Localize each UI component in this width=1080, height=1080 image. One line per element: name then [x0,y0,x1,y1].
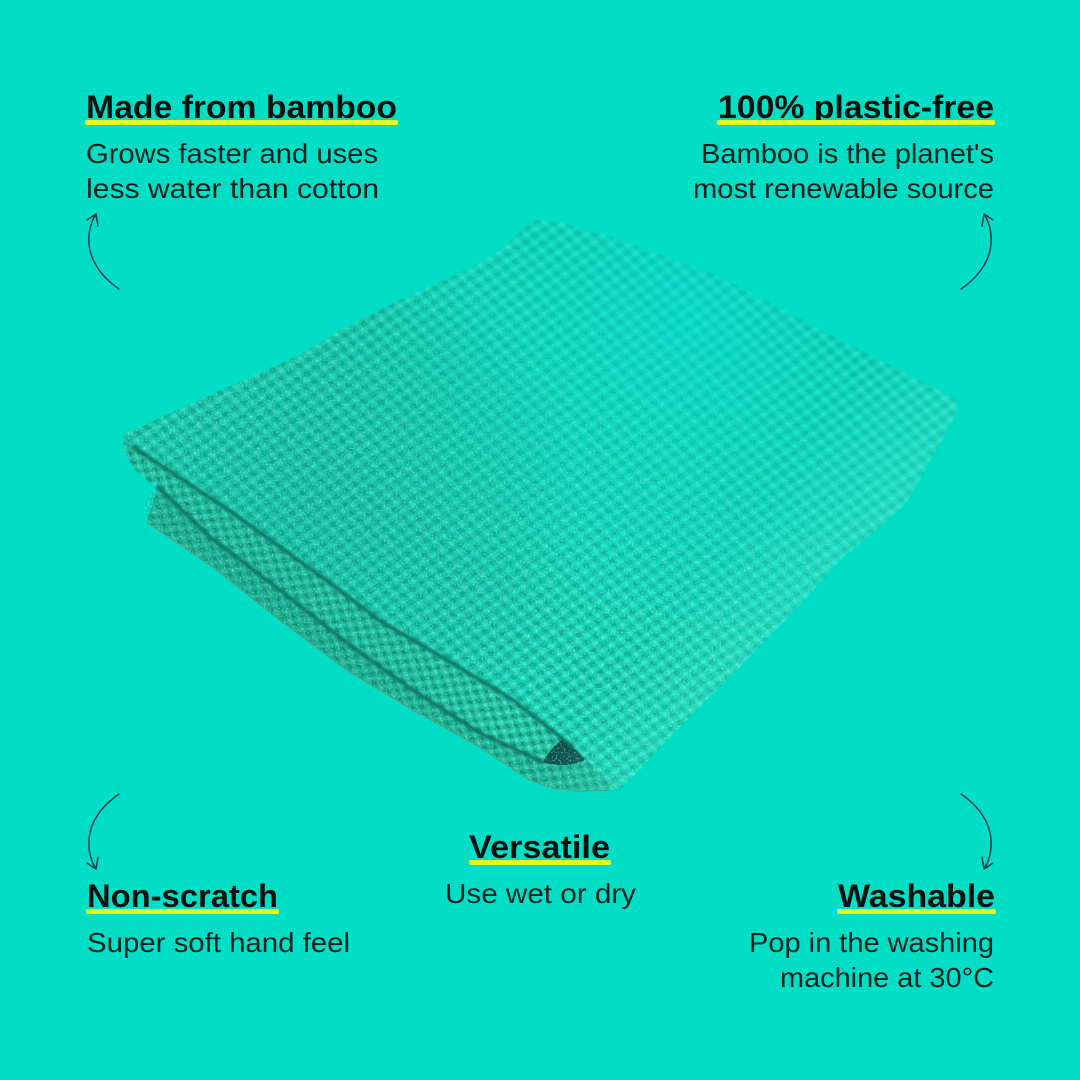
description: Bamboo is the planet's [701,138,994,169]
description [693,138,994,204]
cloth: bottom fold layer [147,487,627,791]
highlight underline [86,909,279,914]
description: Grows faster and uses [86,138,378,169]
cloth: fabric grain [115,215,965,795]
description: Pop in the washing [749,927,994,958]
cloth: middle fold layer [124,440,570,762]
arrow: bottom right [961,794,993,869]
heading: 100% plastic-free [718,89,994,125]
cloth: dark pocket between folds [543,738,590,765]
description: Use wet or dry [445,878,636,909]
highlight underline [85,120,398,125]
callout: plastic free [693,89,995,204]
description [86,138,379,204]
callout: made from bamboo [85,89,398,204]
arrow: top right [961,214,993,289]
description: less water than cotton [86,173,379,204]
description [749,927,994,993]
heading: Versatile [469,829,610,865]
cloth: fold creases [133,447,573,762]
heading: Non-scratch [87,878,278,914]
heading: Washable [838,878,995,914]
highlight underline [837,909,996,914]
photo: folded bamboo cloth [115,215,965,795]
cloth: top surface [122,220,958,788]
heading: Made from bamboo [86,89,397,125]
cloth: light and shadow [115,215,965,795]
highlight underline [717,120,995,125]
description: most renewable source [693,173,994,204]
callout: non-scratch [86,878,350,958]
callout: washable [749,878,996,993]
description: machine at 30°C [780,962,994,993]
arrow: bottom left [87,794,119,869]
description: Super soft hand feel [87,927,350,958]
arrow: top left [87,214,119,289]
callout: versatile [445,829,636,909]
highlight underline [469,860,611,865]
